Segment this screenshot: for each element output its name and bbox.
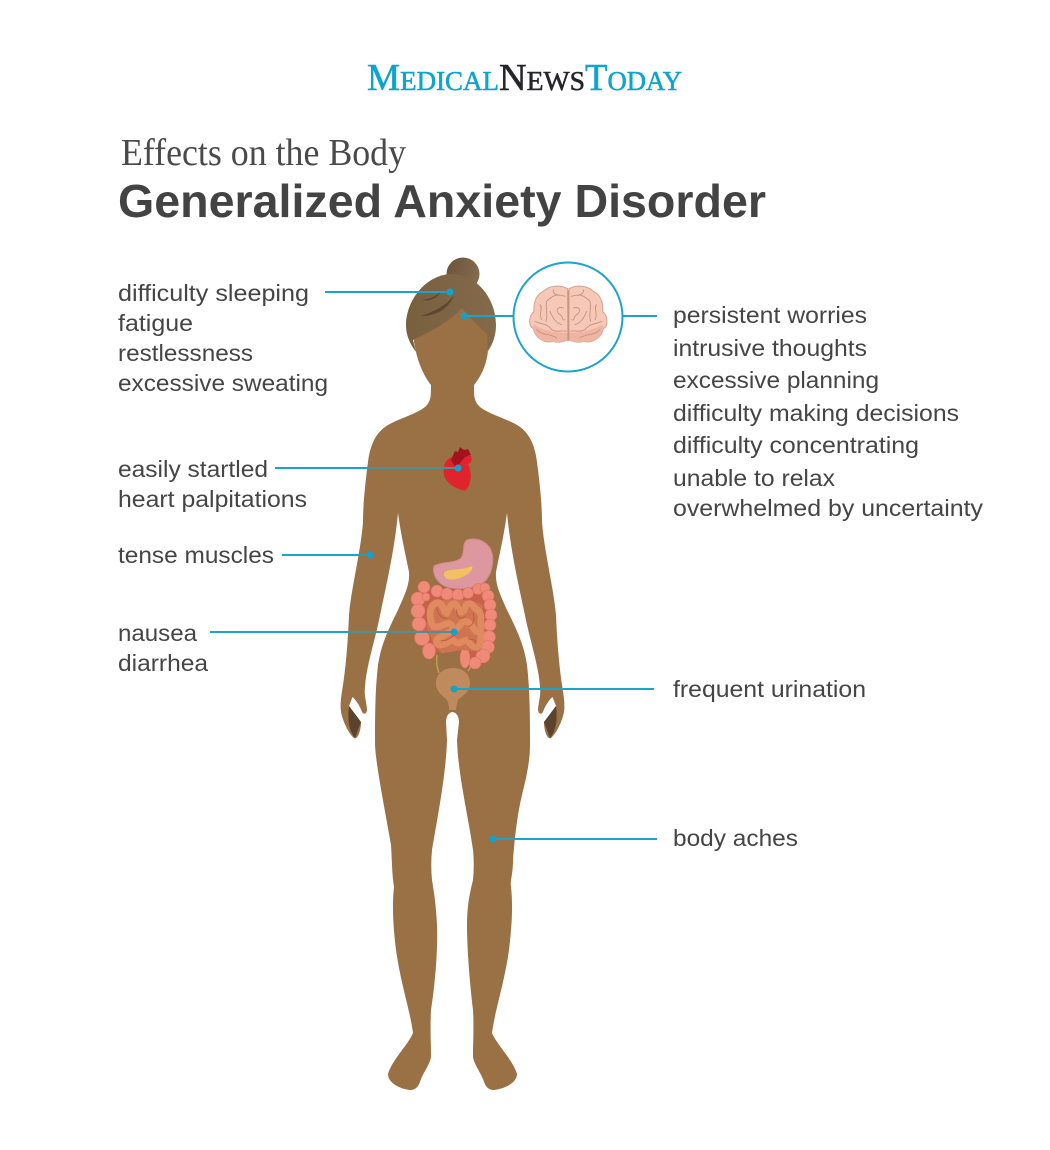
text: mental symptoms: overwhelmed by uncertainty	[673, 495, 984, 521]
left hemisphere	[530, 286, 568, 342]
circle	[514, 262, 622, 372]
hair strands	[421, 292, 454, 316]
text: heart symptoms: easily startled	[118, 456, 268, 482]
connector: brain symptoms	[460, 312, 657, 320]
text: digestive symptoms: diarrhea	[118, 650, 208, 676]
text: mental symptoms: intrusive thoughts	[673, 335, 867, 361]
title: Generalized Anxiety Disorder	[118, 175, 766, 227]
text: sleep symptoms: difficulty sleeping	[118, 280, 309, 306]
text: sleep symptoms: restlessness	[118, 340, 253, 366]
body figure	[341, 258, 564, 1090]
logo: TODAY	[585, 57, 682, 99]
text: mental symptoms	[673, 302, 984, 521]
icon: stomach	[434, 539, 493, 589]
pancreas	[444, 566, 472, 580]
large intestine	[411, 581, 497, 669]
logo: NEWS	[499, 57, 585, 99]
text: urination: frequent urination	[673, 676, 866, 702]
text: digestive symptoms: nausea	[118, 620, 197, 646]
text: sleep symptoms: excessive sweating	[118, 370, 328, 396]
hand shadows	[348, 706, 557, 738]
brain callout	[514, 262, 622, 372]
connector: body aches	[490, 836, 657, 842]
connector: muscles	[282, 552, 374, 558]
text: body aches: body aches	[673, 825, 798, 851]
text: mental symptoms: difficulty concentrating	[673, 432, 919, 458]
icon: ureters	[437, 655, 473, 673]
connector: urination	[450, 686, 654, 692]
text: mental symptoms: difficulty making decisions	[673, 400, 959, 426]
connector: digestive	[210, 628, 458, 636]
logo: MEDICAL	[367, 57, 499, 99]
body silhouette	[341, 300, 564, 1090]
hair bun	[446, 258, 480, 290]
icon: heart	[444, 447, 472, 490]
text: digestive symptoms	[118, 620, 208, 676]
connector: sleep symptoms	[325, 288, 454, 296]
text: sleep symptoms: fatigue	[118, 310, 193, 336]
icon: intestines	[411, 581, 497, 669]
connector: heart symptoms	[275, 464, 462, 472]
small intestine	[427, 599, 484, 653]
logo	[367, 57, 682, 99]
hair	[406, 274, 496, 352]
text: heart symptoms	[118, 456, 307, 512]
icon: bladder	[436, 668, 470, 710]
right hemisphere	[568, 286, 607, 342]
text: mental symptoms: unable to relax	[673, 465, 836, 491]
text: heart symptoms: heart palpitations	[118, 486, 307, 512]
text: mental symptoms: persistent worries	[673, 302, 867, 328]
text: muscles: tense muscles	[118, 542, 274, 568]
subtitle: Effects on the Body	[121, 132, 406, 174]
text: mental symptoms: excessive planning	[673, 367, 879, 393]
text: sleep symptoms	[118, 280, 328, 396]
icon: brain	[530, 286, 607, 342]
